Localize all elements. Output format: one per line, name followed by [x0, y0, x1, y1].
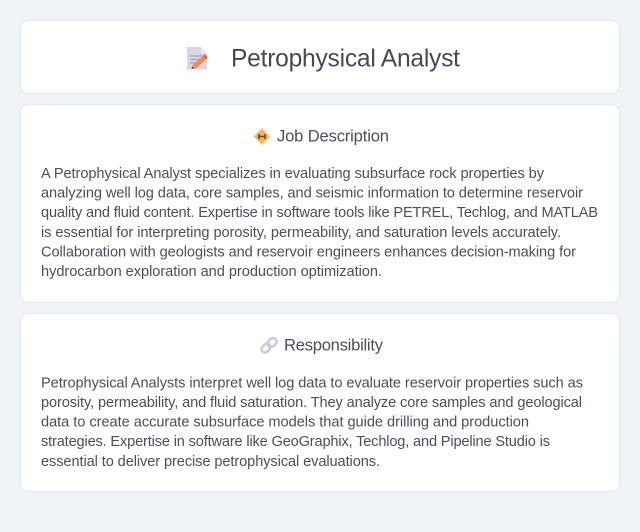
text block: job description [41, 166, 598, 280]
text block: job description: hydrocarbon exploration and production optimization. [41, 264, 382, 280]
text block: responsibility [41, 375, 583, 470]
icon: chain link [260, 336, 278, 354]
text block: responsibility: strategies. Expertise in software like GeoGraphix, Techlog, and Pipeline Studio is [41, 434, 550, 450]
text block: responsibility: data to create accurate subsurface models that guide drilling and production [41, 415, 529, 431]
heading: responsibility: Responsibility [284, 336, 384, 354]
panel: title header [20, 20, 620, 94]
icon: orange diamond sign [254, 128, 270, 144]
text block: job description: A Petrophysical Analyst specializes in evaluating subsurface rock properties by [41, 166, 545, 182]
text block: job description: analyzing well log data, core samples, and seismic information to determine reservoir [41, 186, 583, 202]
heading: job description: Job Description [277, 126, 389, 146]
title: Petrophysical Analyst [231, 46, 460, 72]
panel: job description [20, 104, 620, 302]
panel: responsibility [20, 314, 620, 492]
text block: job description: is essential for interpreting porosity, permeability, and saturation levels accurately. [41, 225, 561, 241]
text block: responsibility: Petrophysical Analysts interpret well log data to evaluate reservoir properties such as [41, 375, 583, 391]
text block: responsibility: porosity, permeability, and fluid saturation. They analyze core samples and geological [41, 395, 582, 411]
text block: job description: quality and fluid content. Expertise in software tools like PETREL, Techlog, and MATLAB [41, 205, 598, 221]
text block: job description: Collaboration with geologists and reservoir engineers enhances decision-making for [41, 244, 576, 260]
text block: responsibility: essential to deliver precise petrophysical evaluations. [41, 454, 380, 470]
icon: document with pencil [187, 47, 208, 70]
